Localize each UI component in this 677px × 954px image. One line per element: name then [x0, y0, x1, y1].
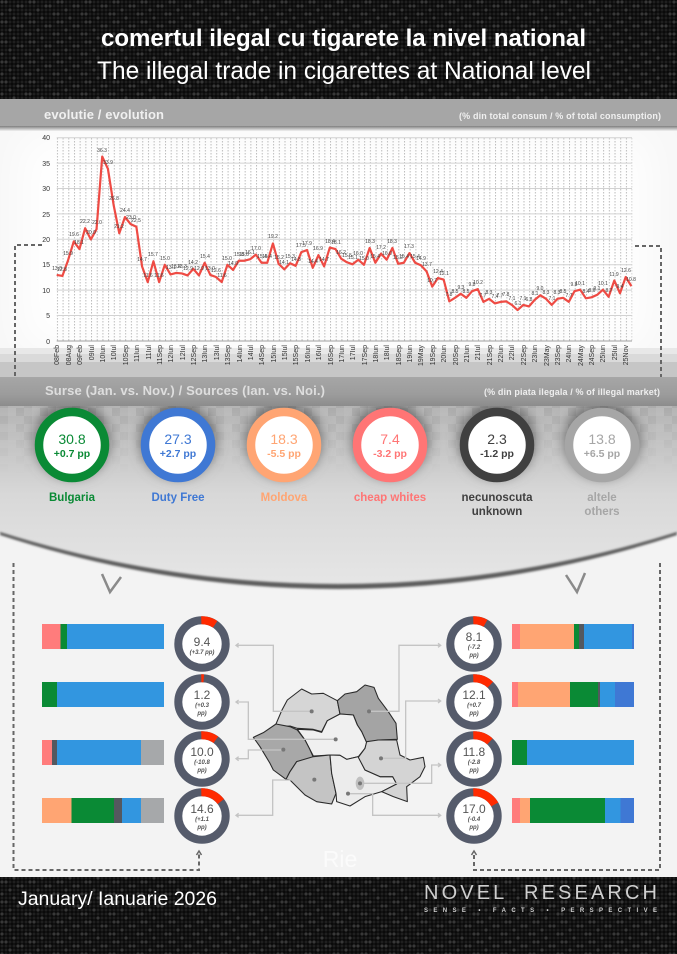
donut: 17.0 — [450, 792, 498, 840]
source: others: 13.8 — [588, 431, 616, 447]
data labels: 13.4 — [171, 264, 181, 270]
data labels: 17.3 — [404, 244, 414, 250]
donut: 14.6: 14.6 — [190, 802, 214, 816]
donut: 17.0: pp) — [468, 825, 479, 831]
data labels: 14.0 — [228, 261, 238, 267]
data labels: 13.1 — [166, 265, 176, 271]
data labels: 16.9 — [313, 246, 323, 252]
x axis labels: 21Iun — [464, 345, 471, 363]
donut: 12.1 — [450, 678, 498, 726]
x axis labels: 09Iul — [89, 345, 96, 360]
dashed link: lower left — [14, 563, 199, 870]
data labels: 11.6 — [217, 273, 227, 279]
source: cheap whites — [354, 412, 426, 504]
source: others: others — [584, 506, 620, 518]
section heading bar: sources: Surse (Jan. vs. Nov.) / Sources (Ian. vs. Noi.) — [45, 383, 325, 398]
chevron: left — [102, 574, 121, 592]
x axis labels: 16Iul — [316, 345, 323, 360]
data labels: 26.8 — [109, 196, 119, 202]
x axis labels: 10Iul — [111, 345, 118, 360]
source: Moldova: 18.3 — [270, 431, 298, 447]
data labels: 14.7 — [319, 257, 329, 263]
donut: 12.1: (+0.7 — [467, 703, 482, 709]
data labels: 18.1 — [331, 240, 341, 246]
source: unknown: unknown — [472, 506, 522, 518]
y axis labels: 30 — [42, 186, 50, 193]
panel: header — [0, 0, 677, 99]
data labels: 7.8 — [503, 292, 510, 298]
bar: region 1 left — [42, 624, 164, 649]
y axis labels: 15 — [42, 262, 50, 269]
x axis labels: 13Iul — [214, 345, 221, 360]
data labels: 13.3 — [177, 264, 187, 270]
donut: 10.0: pp) — [196, 768, 207, 774]
data labels: 12.9 — [194, 266, 204, 272]
date: January/ Ianuarie 2026 — [18, 889, 217, 910]
panel: lower regional section background — [0, 530, 677, 877]
data labels: 7.1 — [520, 296, 527, 302]
x axis labels: 25Nov — [623, 344, 630, 365]
source: others: altele — [587, 492, 617, 504]
y axis labels: 0 — [46, 339, 50, 346]
data labels: 9.8 — [469, 282, 476, 288]
data labels: 19.2 — [268, 234, 278, 240]
data labels: 11.6 — [143, 273, 153, 279]
source: Duty Free: 27.3 — [164, 431, 192, 447]
bar: region 3 right — [512, 740, 634, 765]
data labels: 19.6 — [69, 232, 79, 238]
donut: 12.1: pp) — [468, 711, 479, 717]
x axis labels: 18Iun — [373, 345, 380, 363]
data labels: 15.4 — [257, 254, 267, 260]
data labels: 15.7 — [148, 252, 158, 258]
curved sources background — [0, 405, 677, 585]
donut: 12.1: 12.1 — [462, 688, 486, 702]
data labels: 22.2 — [80, 219, 90, 225]
donut: 10.0: (-10.8 — [194, 760, 210, 766]
title: English: The illegal trade in cigarettes at National level — [97, 57, 591, 85]
x axis labels: 11Iun — [134, 345, 141, 362]
data labels: 13.0 — [52, 266, 62, 272]
y axis labels: 35 — [42, 161, 50, 168]
data labels: 8.1 — [532, 291, 539, 297]
data labels: 7.1 — [509, 296, 516, 302]
curved edge shadow — [0, 532, 677, 589]
x axis labels: 17Sep — [362, 345, 369, 365]
source: Moldova: Moldova — [261, 492, 308, 504]
x axis labels: 23Sep — [555, 345, 562, 365]
source: Moldova: -5.5 pp — [267, 448, 301, 460]
data labels: 15.4 — [200, 254, 210, 260]
source: Duty Free — [145, 412, 211, 504]
source: Bulgaria — [39, 412, 105, 504]
data labels: 8.4 — [583, 289, 590, 295]
x axis labels: 15Iun — [271, 345, 278, 363]
x axis labels — [54, 344, 630, 366]
x axis labels: 15Sep — [293, 345, 300, 365]
donut: 1.2: (+0.3 — [195, 703, 210, 709]
data labels: 18.1 — [74, 240, 84, 246]
data labels: 22.5 — [131, 218, 141, 224]
donut: 8.1: pp) — [468, 653, 479, 659]
data labels: 9.0 — [537, 286, 544, 292]
data labels: 8.3 — [554, 290, 561, 296]
x axis labels: 25Iun — [600, 345, 607, 363]
data labels: 18.3 — [387, 239, 397, 245]
x axis labels: 20Sep — [453, 345, 460, 365]
left stacked bars — [42, 624, 164, 823]
data labels: 16.1 — [245, 250, 255, 256]
x axis labels: 22Sep — [521, 345, 528, 365]
x axis labels: 16Sep — [328, 345, 335, 365]
data labels: 16.0 — [353, 251, 363, 257]
data labels: 36.3 — [97, 148, 107, 154]
x axis labels: 08Feb — [54, 345, 61, 365]
x axis labels: 11Sep — [157, 345, 164, 365]
map of Romania with regions — [253, 685, 425, 806]
source: Bulgaria: 30.8 — [58, 431, 86, 447]
source: unknown: -1.2 pp — [480, 448, 514, 460]
data labels: 6.8 — [526, 297, 533, 303]
donut: 8.1: 8.1 — [466, 630, 483, 644]
data labels: 15.2 — [274, 255, 284, 261]
data labels: 14.4 — [308, 259, 318, 265]
donut: 11.8: pp) — [468, 768, 479, 774]
x axis labels: 17Iul — [350, 345, 357, 360]
source: unknown — [462, 412, 533, 518]
x axis labels: 21Iul — [475, 345, 482, 360]
x axis labels: 20Iun — [441, 345, 448, 363]
data labels: 11.6 — [154, 273, 164, 279]
line chart: illegal share of total consumption — [42, 135, 636, 366]
source: unknown: necunoscuta — [462, 492, 533, 504]
dashed link: chart left — [15, 245, 42, 377]
data labels: 20.0 — [86, 230, 96, 236]
x axis labels: 09Feb — [77, 345, 84, 365]
data labels: 13.0 — [205, 266, 215, 272]
x axis labels: 15Iul — [282, 345, 289, 360]
dashed link: chart right — [635, 246, 661, 377]
data labels: 10.1 — [575, 281, 585, 287]
data labels: 16.2 — [336, 250, 346, 256]
arrowhead: lower left — [196, 851, 202, 855]
x axis labels: 19Sep — [430, 345, 437, 365]
source: cheap whites: -3.2 pp — [373, 448, 407, 460]
data labels: 6.1 — [515, 301, 522, 307]
donut: 10.0 — [178, 735, 226, 783]
title: Romanian: comertul ilegal cu tigarete la nivel national — [101, 25, 586, 52]
data labels: 15.8 — [234, 252, 244, 258]
panel: sources section — [0, 377, 677, 589]
donut: 11.8: 11.8 — [463, 745, 486, 759]
data labels: 14.9 — [416, 256, 426, 262]
data labels: 15.0 — [160, 256, 170, 262]
section heading bar: evolution — [0, 99, 677, 131]
data labels: 10.7 — [427, 278, 437, 284]
data labels: 21.2 — [114, 224, 124, 230]
x axis labels: 16Iun — [305, 345, 312, 363]
y axis labels: 10 — [42, 288, 50, 295]
chevron: right — [566, 573, 585, 592]
donut: 9.4: 9.4 — [194, 635, 211, 649]
right stacked bars — [512, 624, 634, 823]
data labels: 15.0 — [222, 256, 232, 262]
data labels: 15.3 — [285, 254, 295, 260]
y axis labels: 40 — [42, 135, 50, 142]
data labels: 15.2 — [393, 255, 403, 261]
x axis labels: 24Sep — [589, 345, 596, 365]
data labels: 14.1 — [279, 260, 289, 266]
x axis labels: 25Iul — [612, 345, 619, 360]
data labels: 16.0 — [382, 251, 392, 257]
dashed link: lower right — [474, 563, 660, 870]
arrowhead: lower right — [472, 851, 476, 855]
data labels: 8.5 — [463, 289, 470, 295]
x axis labels: 13Sep — [225, 345, 232, 365]
section heading bar: evolution: (% din total consum / % of total consumption) — [459, 111, 661, 121]
data labels: 15.8 — [239, 252, 249, 258]
source: cheap whites: 7.4 — [380, 431, 400, 447]
data labels: 8.3 — [486, 290, 493, 296]
bar: region 2 right — [512, 682, 634, 707]
bar: region 4 right — [512, 798, 634, 823]
circle shadows — [34, 402, 640, 478]
section heading bar: sources: (% din piata ilegala / % of illegal market) — [484, 387, 660, 397]
data labels: 9.4 — [617, 284, 624, 290]
data labels: 15.1 — [348, 255, 358, 261]
source: Duty Free: Duty Free — [151, 492, 205, 504]
data labels: 7.7 — [480, 293, 487, 299]
data labels: 17.5 — [296, 243, 306, 249]
data labels: 23.0 — [126, 215, 136, 221]
data labels: 10.1 — [598, 281, 608, 287]
data labels: 12.9 — [183, 266, 193, 272]
source: Bulgaria: +0.7 pp — [54, 448, 90, 460]
data labels: 7.7 — [497, 293, 504, 299]
source: others — [569, 412, 635, 518]
x axis labels: 23May — [544, 345, 551, 366]
donut: 14.6: (+1.1 — [195, 817, 210, 823]
source: Bulgaria: Bulgaria — [49, 492, 96, 504]
left donuts — [178, 620, 226, 840]
connector lines with arrowheads — [236, 643, 441, 817]
x axis labels: 08Aug — [66, 345, 73, 365]
data labels: 14.2 — [188, 260, 198, 266]
x axis labels: 11Iul — [146, 345, 153, 360]
data labels: 15.9 — [63, 251, 73, 257]
data labels: 8.5 — [452, 289, 459, 295]
panel: footer — [0, 877, 677, 954]
data labels: 22.0 — [92, 220, 102, 226]
data labels: 9.8 — [571, 282, 578, 288]
donut: 1.2: 1.2 — [194, 688, 211, 702]
data labels — [52, 148, 636, 307]
donut: 8.1: (-7.2 — [468, 645, 481, 651]
donut: 10.0: 10.0 — [190, 745, 214, 759]
x axis labels: 22Iul — [509, 345, 516, 360]
data labels: 15.4 — [410, 254, 420, 260]
bar: region 2 left — [42, 682, 164, 707]
x axis labels: 18Iul — [384, 345, 391, 360]
x axis labels: 12Sep — [191, 345, 198, 365]
logo: Novel Research: SENSE • FACTS • PERSPECTIVE — [424, 908, 657, 914]
data labels: 15.4 — [370, 254, 380, 260]
y axis labels — [42, 135, 50, 346]
data labels: 18.4 — [325, 239, 335, 245]
x axis labels: 23Iun — [532, 345, 539, 363]
right donuts — [450, 620, 498, 840]
y axis labels: 5 — [46, 313, 50, 320]
data line — [57, 157, 631, 310]
donut: 1.2 — [178, 678, 226, 726]
x axis labels: 10Sep — [123, 345, 130, 365]
source: Duty Free: +2.7 pp — [160, 448, 196, 460]
x axis labels: 18Sep — [396, 345, 403, 365]
source: unknown: 2.3 — [487, 431, 507, 447]
donut: 9.4 — [178, 620, 226, 668]
donut: 17.0: 17.0 — [462, 802, 486, 816]
y axis labels: 25 — [42, 212, 50, 219]
x axis labels: 19Iun — [407, 345, 414, 363]
data labels: 18.3 — [365, 239, 375, 245]
data labels: 13.7 — [422, 262, 432, 268]
data labels: 8.7 — [606, 288, 613, 294]
data labels: 9.1 — [594, 286, 601, 292]
data labels: 15.5 — [342, 253, 352, 259]
donut: 11.8: (-2.8 — [468, 760, 481, 766]
bar: region 4 left — [42, 798, 164, 823]
data labels: 8.3 — [543, 290, 550, 296]
region markers — [281, 709, 383, 796]
x axis labels: 14Iul — [248, 345, 255, 360]
data labels: 8.6 — [589, 288, 596, 294]
data labels: 12.4 — [433, 269, 443, 275]
data labels: 15.0 — [359, 256, 369, 262]
data labels: 17.2 — [376, 245, 386, 251]
donut: 14.6: pp) — [196, 825, 207, 831]
data labels: 12.1 — [439, 271, 449, 277]
data labels: 12.8 — [57, 267, 67, 273]
data labels: 12.6 — [211, 268, 221, 274]
x axis labels: 22Iun — [498, 345, 505, 363]
source: cheap whites: cheap whites — [354, 492, 426, 504]
bar: region 1 right — [512, 624, 634, 649]
x axis labels: 24May — [578, 345, 585, 366]
data labels: 7.4 — [492, 294, 499, 300]
map regions — [253, 685, 425, 806]
data labels: 10.8 — [626, 277, 636, 283]
x axis labels: 13Iun — [202, 345, 209, 363]
section heading bar: evolution: evolutie / evolution — [44, 107, 164, 122]
bar: region 3 left — [42, 740, 164, 765]
logo: Novel Research — [424, 882, 657, 914]
data labels: 7.1 — [549, 296, 556, 302]
x axis labels: 14Iun — [237, 345, 244, 363]
panel: evolution chart section — [0, 99, 677, 377]
x axis labels: 21Sep — [487, 345, 494, 365]
data labels: 10.2 — [473, 280, 483, 286]
x axis labels: 19May — [418, 345, 425, 366]
data labels: 9.3 — [458, 285, 465, 291]
donut: 17.0: (-0.4 — [468, 817, 481, 823]
data labels: 14.8 — [291, 257, 301, 263]
data labels: 8.5 — [560, 289, 567, 295]
donut: 8.1 — [450, 620, 498, 668]
x axis labels: 10Iun — [100, 345, 107, 363]
source: Moldova — [251, 412, 317, 504]
data labels: 15.4 — [262, 254, 272, 260]
section heading bar: sources — [0, 377, 677, 406]
mosaic shading — [0, 406, 677, 413]
ghost text: Rie — [323, 846, 357, 872]
donut: 9.4: (+3.7 pp) — [190, 650, 214, 656]
data labels: 7.7 — [566, 293, 573, 299]
source: others: +6.5 pp — [584, 448, 620, 460]
y axis labels: 20 — [42, 237, 50, 244]
data labels: 24.4 — [120, 208, 130, 214]
donut: 11.8 — [450, 735, 498, 783]
data labels: 17.0 — [251, 246, 261, 252]
donut: 14.6 — [178, 792, 226, 840]
x axis labels: 24Iun — [566, 345, 573, 363]
logo: Novel Research: NOVEL RESEARCH — [424, 882, 657, 904]
data labels: 33.9 — [103, 160, 113, 166]
data labels: 7.8 — [446, 292, 453, 298]
data labels: 15.4 — [399, 254, 409, 260]
x axis labels: 12Iul — [180, 345, 187, 360]
x axis labels: 14Sep — [259, 345, 266, 365]
x axis labels: 12Iun — [168, 345, 175, 363]
x axis labels: 17Iun — [339, 345, 346, 363]
data labels: 12.6 — [621, 268, 631, 274]
data labels: 11.9 — [609, 272, 619, 278]
donut: 1.2: pp) — [196, 711, 207, 717]
data labels: 14.7 — [137, 257, 147, 263]
data labels: 17.9 — [302, 241, 312, 247]
